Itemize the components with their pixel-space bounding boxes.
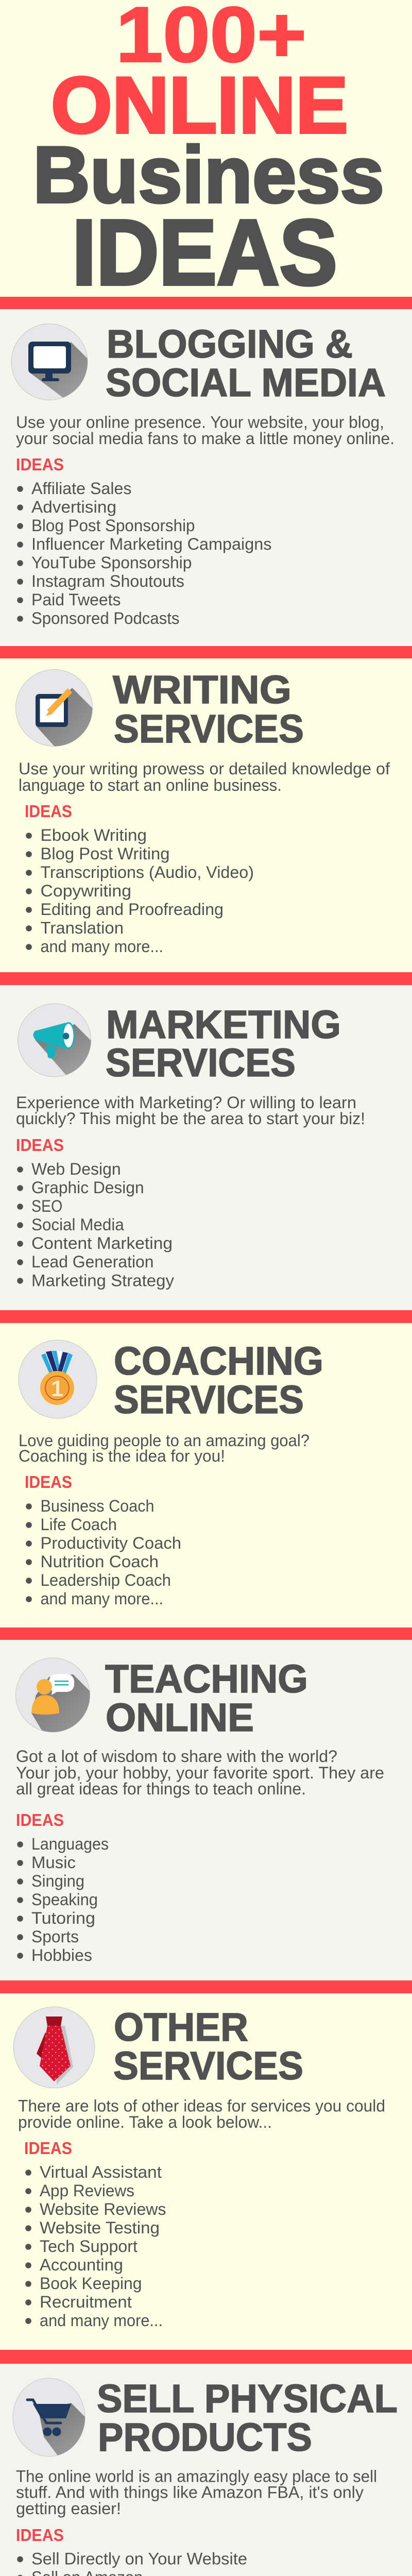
icon: medal	[19, 1340, 97, 1418]
ideas list: Translation	[40, 919, 124, 937]
ideas list	[17, 1160, 174, 1290]
heading: SOCIAL MEDIA	[106, 361, 386, 405]
ideas list	[17, 479, 271, 628]
ideas list	[17, 1835, 109, 1964]
ideas list: Virtual Assistant	[40, 2163, 162, 2181]
heading: SERVICES	[114, 707, 304, 751]
description	[19, 759, 390, 794]
icon: shopping cart	[12, 2378, 85, 2456]
description: provide online. Take a look below...	[18, 2113, 272, 2131]
divider band	[0, 972, 412, 985]
ideas list: and many more...	[40, 1589, 163, 1608]
ideas list	[17, 2549, 248, 2576]
title: ONLINE	[51, 61, 348, 149]
ideas list: SEO	[31, 1197, 62, 1215]
panel: other services	[0, 1993, 412, 2350]
ideas list: Sell Directly on Your Website	[31, 2549, 247, 2568]
ideas list: Tutoring	[31, 1909, 95, 1927]
panel: blogging and social media	[0, 309, 412, 646]
ideas list: and many more...	[40, 937, 163, 956]
ideas list	[25, 2163, 166, 2330]
heading: MARKETING	[106, 1003, 341, 1047]
ideas list: Music	[31, 1853, 76, 1872]
description: quickly? This might be the area to start your biz!	[16, 1109, 365, 1128]
panel background	[0, 1323, 412, 1628]
ideas label: IDEAS	[25, 802, 72, 821]
heading: PRODUCTS	[98, 2415, 312, 2460]
ideas label: IDEAS	[16, 2526, 64, 2545]
ideas label: IDEAS	[16, 455, 64, 474]
ideas list	[26, 1497, 181, 1608]
panel background	[0, 658, 412, 972]
ideas list: Affiliate Sales	[31, 479, 132, 498]
ideas list: Sports	[31, 1927, 79, 1946]
description	[16, 413, 394, 448]
panel: marketing services	[0, 985, 412, 1310]
ideas label: IDEAS	[16, 1136, 64, 1155]
heading: BLOGGING &	[107, 322, 353, 366]
ideas list: Speaking	[31, 1890, 98, 1909]
ideas list	[26, 826, 254, 956]
heading	[105, 1657, 308, 1740]
description: all great ideas for things to teach online.	[16, 1780, 306, 1798]
ideas list: Marketing Strategy	[31, 1272, 174, 1290]
ideas list: App Reviews	[40, 2181, 134, 2200]
panel background	[0, 1993, 412, 2350]
panel background	[0, 1640, 412, 1980]
panel background	[0, 309, 412, 646]
heading: TEACHING	[105, 1657, 308, 1701]
ideas list: and many more...	[40, 2311, 163, 2330]
description: There are lots of other ideas for services you could	[18, 2097, 385, 2115]
ideas list: Tech Support	[40, 2237, 138, 2256]
description	[16, 1747, 384, 1798]
ideas list: Web Design	[31, 1160, 121, 1178]
ideas list: Recruitment	[40, 2293, 132, 2311]
ideas list: Blog Post Writing	[40, 844, 170, 863]
ideas list: Instagram Shoutouts	[31, 572, 184, 590]
ideas label: IDEAS	[16, 1810, 64, 1829]
ideas list: Editing and Proofreading	[40, 900, 224, 919]
heading	[113, 2005, 303, 2088]
ideas list: Social Media	[31, 1215, 124, 1234]
description: Love guiding people to an amazing goal?	[19, 1431, 310, 1450]
panel: sell physical products	[0, 2364, 412, 2576]
ideas list: Languages	[31, 1835, 109, 1853]
heading	[97, 2377, 398, 2460]
heading	[106, 1003, 341, 1085]
description	[19, 1431, 310, 1465]
ideas list: Book Keeping	[40, 2274, 142, 2293]
heading: WRITING	[113, 668, 291, 712]
ideas list: YouTube Sponsorship	[31, 553, 192, 572]
description	[18, 2097, 385, 2131]
ideas list: Business Coach	[40, 1497, 154, 1515]
description: language to start an online business.	[19, 776, 282, 794]
divider band	[0, 297, 412, 309]
divider band	[0, 1310, 412, 1323]
panel: writing services	[15, 669, 390, 955]
ideas list: Paid Tweets	[31, 590, 121, 609]
divider band	[0, 2350, 412, 2364]
ideas list: Copywriting	[40, 882, 131, 900]
icon: necktie	[13, 2007, 95, 2088]
divider band	[0, 1980, 412, 1993]
panel: coaching services	[0, 1323, 412, 1628]
heading: ONLINE	[106, 1696, 254, 1740]
ideas list: Accounting	[40, 2256, 123, 2274]
heading: SERVICES	[113, 2044, 303, 2088]
heading: SERVICES	[106, 1041, 296, 1085]
panel: teaching online	[0, 1640, 412, 1980]
icon: computer monitor	[11, 324, 88, 400]
description	[16, 1093, 365, 1128]
icon: speaking person	[15, 1658, 90, 1732]
description: Coaching is the idea for you!	[19, 1447, 225, 1465]
ideas list: Website Reviews	[40, 2200, 166, 2218]
ideas list: Transcriptions (Audio, Video)	[40, 863, 254, 882]
panel background	[0, 2364, 412, 2576]
ideas list: Nutrition Coach	[40, 1552, 159, 1571]
ideas list: Lead Generation	[31, 1252, 153, 1271]
icon: medal: 1	[51, 1376, 63, 1401]
description: Use your online presence. Your website, your blog,	[16, 413, 384, 432]
description: Use your writing prowess or detailed knowledge of	[19, 759, 390, 778]
ideas list: Productivity Coach	[40, 1534, 181, 1552]
ideas list: Singing	[31, 1872, 84, 1890]
heading	[106, 322, 386, 405]
heading: OTHER	[114, 2005, 248, 2049]
heading: SERVICES	[114, 1378, 304, 1422]
ideas list: Influencer Marketing Campaigns	[31, 535, 272, 553]
divider band	[0, 1628, 412, 1640]
ideas label: IDEAS	[25, 1472, 72, 1492]
ideas list: Blog Post Sponsorship	[31, 516, 195, 535]
panel background	[0, 985, 412, 1310]
heading	[113, 668, 304, 751]
ideas list: Sponsored Podcasts	[31, 609, 179, 628]
description: Your job, your hobby, your favorite sport. They are	[16, 1764, 384, 1782]
ideas label: IDEAS	[24, 2139, 72, 2158]
ideas list: Hobbies	[31, 1946, 92, 1964]
icon: megaphone	[18, 1004, 91, 1077]
icon: notepad and pencil	[15, 669, 93, 747]
ideas list: Leadership Coach	[40, 1571, 171, 1589]
description: The online world is an amazingly easy place to sell	[16, 2467, 377, 2485]
title: IDEAS	[72, 201, 337, 304]
ideas list: Advertising	[31, 498, 116, 516]
description: getting easier!	[16, 2499, 121, 2518]
heading: COACHING	[114, 1339, 323, 1383]
ideas list: Content Marketing	[31, 1234, 173, 1252]
description: Got a lot of wisdom to share with the world?	[16, 1747, 337, 1766]
divider band	[0, 646, 412, 658]
ideas list: Website Testing	[40, 2218, 160, 2237]
page background	[0, 0, 412, 297]
heading: SELL PHYSICAL	[97, 2377, 398, 2421]
title: Business	[33, 130, 384, 219]
heading	[114, 1339, 323, 1422]
ideas list: Life Coach	[40, 1515, 117, 1534]
ideas list: Graphic Design	[31, 1178, 144, 1197]
description	[16, 2467, 377, 2518]
title	[33, 0, 384, 304]
description: stuff. And with things like Amazon FBA, it's only	[16, 2483, 364, 2502]
description: your social media fans to make a little money online.	[16, 429, 394, 448]
ideas list: Ebook Writing	[40, 826, 147, 844]
description: Experience with Marketing? Or willing to learn	[16, 1093, 356, 1112]
